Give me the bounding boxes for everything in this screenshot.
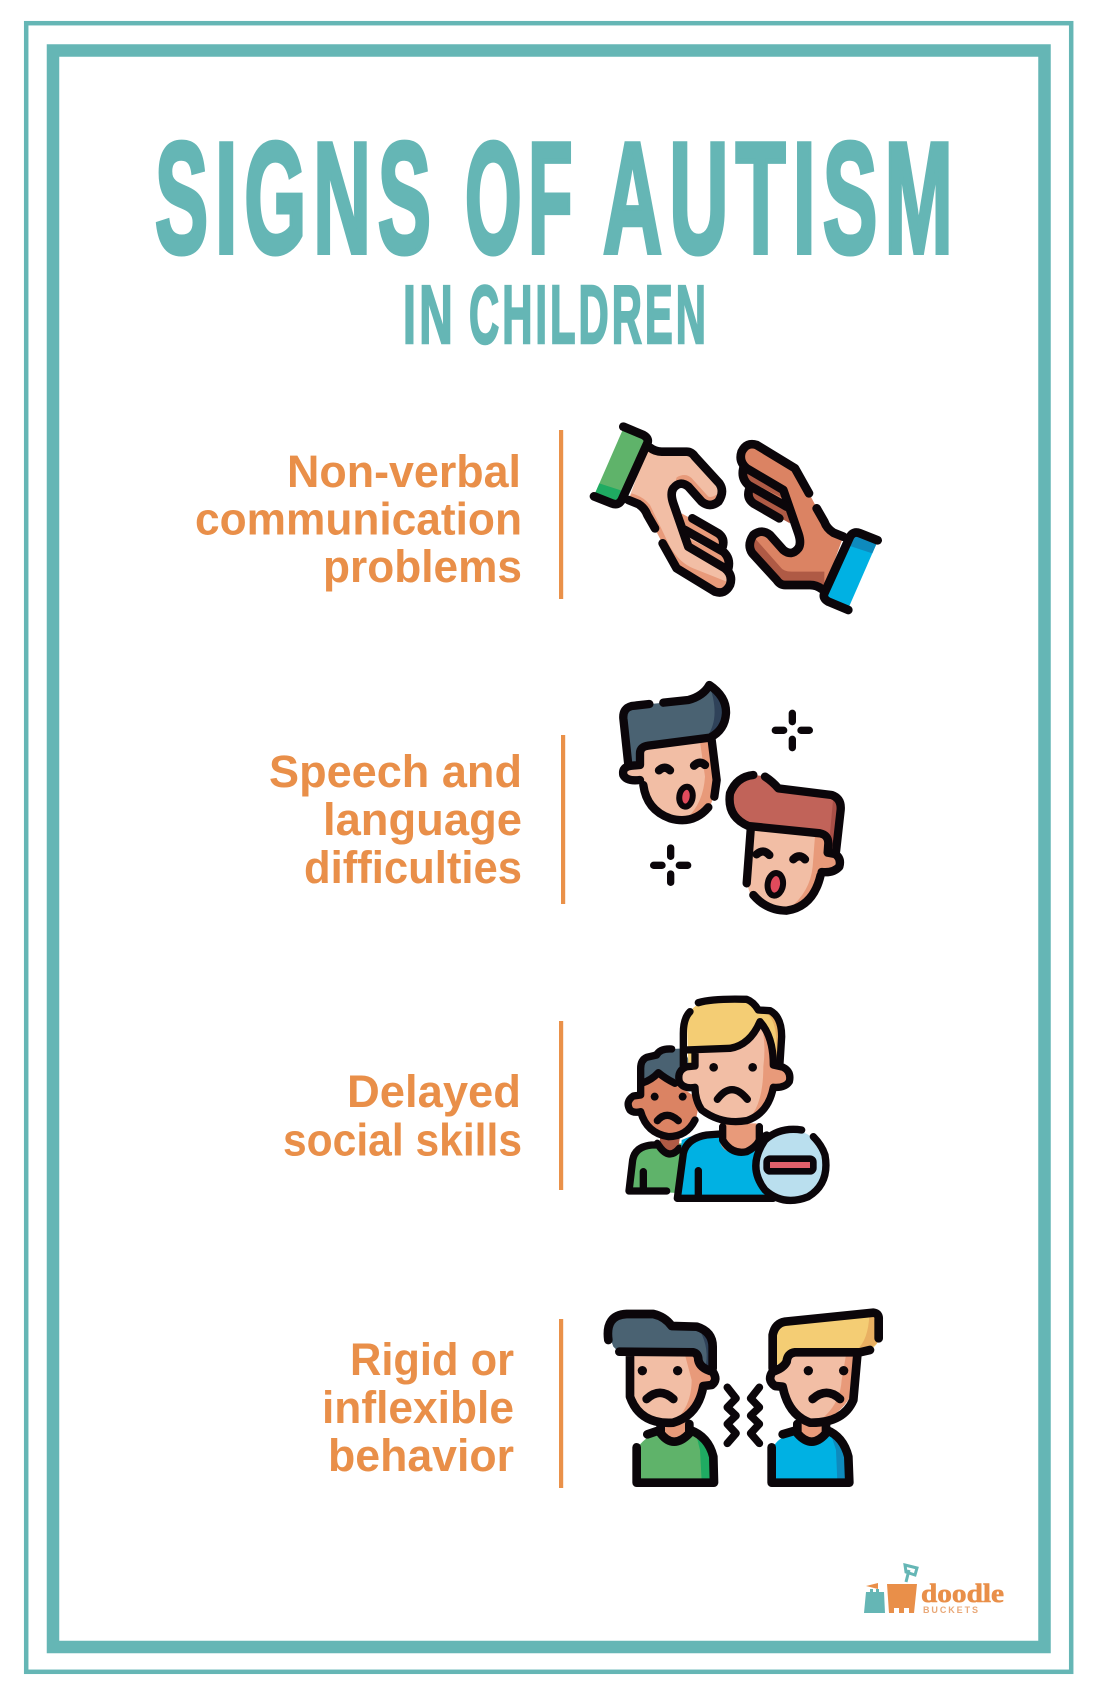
subtitle: CHILDREN (469, 268, 709, 361)
icon: bucket (887, 1584, 917, 1613)
logo subline: BUCKETS (923, 1605, 978, 1615)
label: speech and language difficulties (269, 746, 522, 893)
icon: two hands reaching (594, 427, 878, 610)
panel: rigid or inflexible behavior (322, 1313, 879, 1488)
label: rigid or inflexible behavior: inflexible (322, 1382, 514, 1433)
label: rigid or inflexible behavior: behavior (328, 1430, 514, 1481)
panel: non-verbal communication (195, 427, 878, 610)
divider (559, 1021, 563, 1190)
label: delayed social skills (283, 1066, 522, 1166)
divider (561, 735, 565, 904)
label: delayed social skills: Delayed (347, 1066, 521, 1117)
label: non-verbal communication problems: communication (195, 494, 522, 544)
icon: flag (866, 1583, 878, 1589)
label: non-verbal communication problems: Non-verbal (287, 446, 521, 497)
icon: sandcastle (864, 1589, 885, 1613)
label: rigid or inflexible behavior: Rigid or (350, 1334, 514, 1385)
label: speech and language difficulties: difficulties (304, 842, 522, 893)
icon: two talking heads (623, 685, 843, 911)
logo wordmark: doodle (921, 1579, 1004, 1608)
label: non-verbal communication problems: problems (323, 541, 522, 592)
title (155, 110, 960, 286)
icon: shovel (905, 1565, 917, 1582)
title: OF (465, 110, 579, 286)
label: rigid or inflexible behavior (322, 1334, 514, 1481)
logo: doodle buckets (864, 1565, 1004, 1615)
panel: speech and language (269, 685, 843, 911)
icon: two frowning boys with tension lines (608, 1313, 879, 1483)
title: SIGNS (155, 110, 438, 286)
subtitle (403, 268, 709, 361)
label: speech and language difficulties: Speech and (269, 746, 522, 797)
divider (559, 430, 563, 599)
label: delayed social skills: social skills (283, 1114, 522, 1166)
panel: delayed social skills (283, 999, 826, 1200)
icon: two sad children with minus badge (628, 999, 826, 1200)
divider (559, 1319, 563, 1488)
label: speech and language difficulties: language (323, 794, 522, 845)
subtitle: IN (403, 268, 456, 361)
label: non-verbal communication problems (195, 446, 522, 592)
